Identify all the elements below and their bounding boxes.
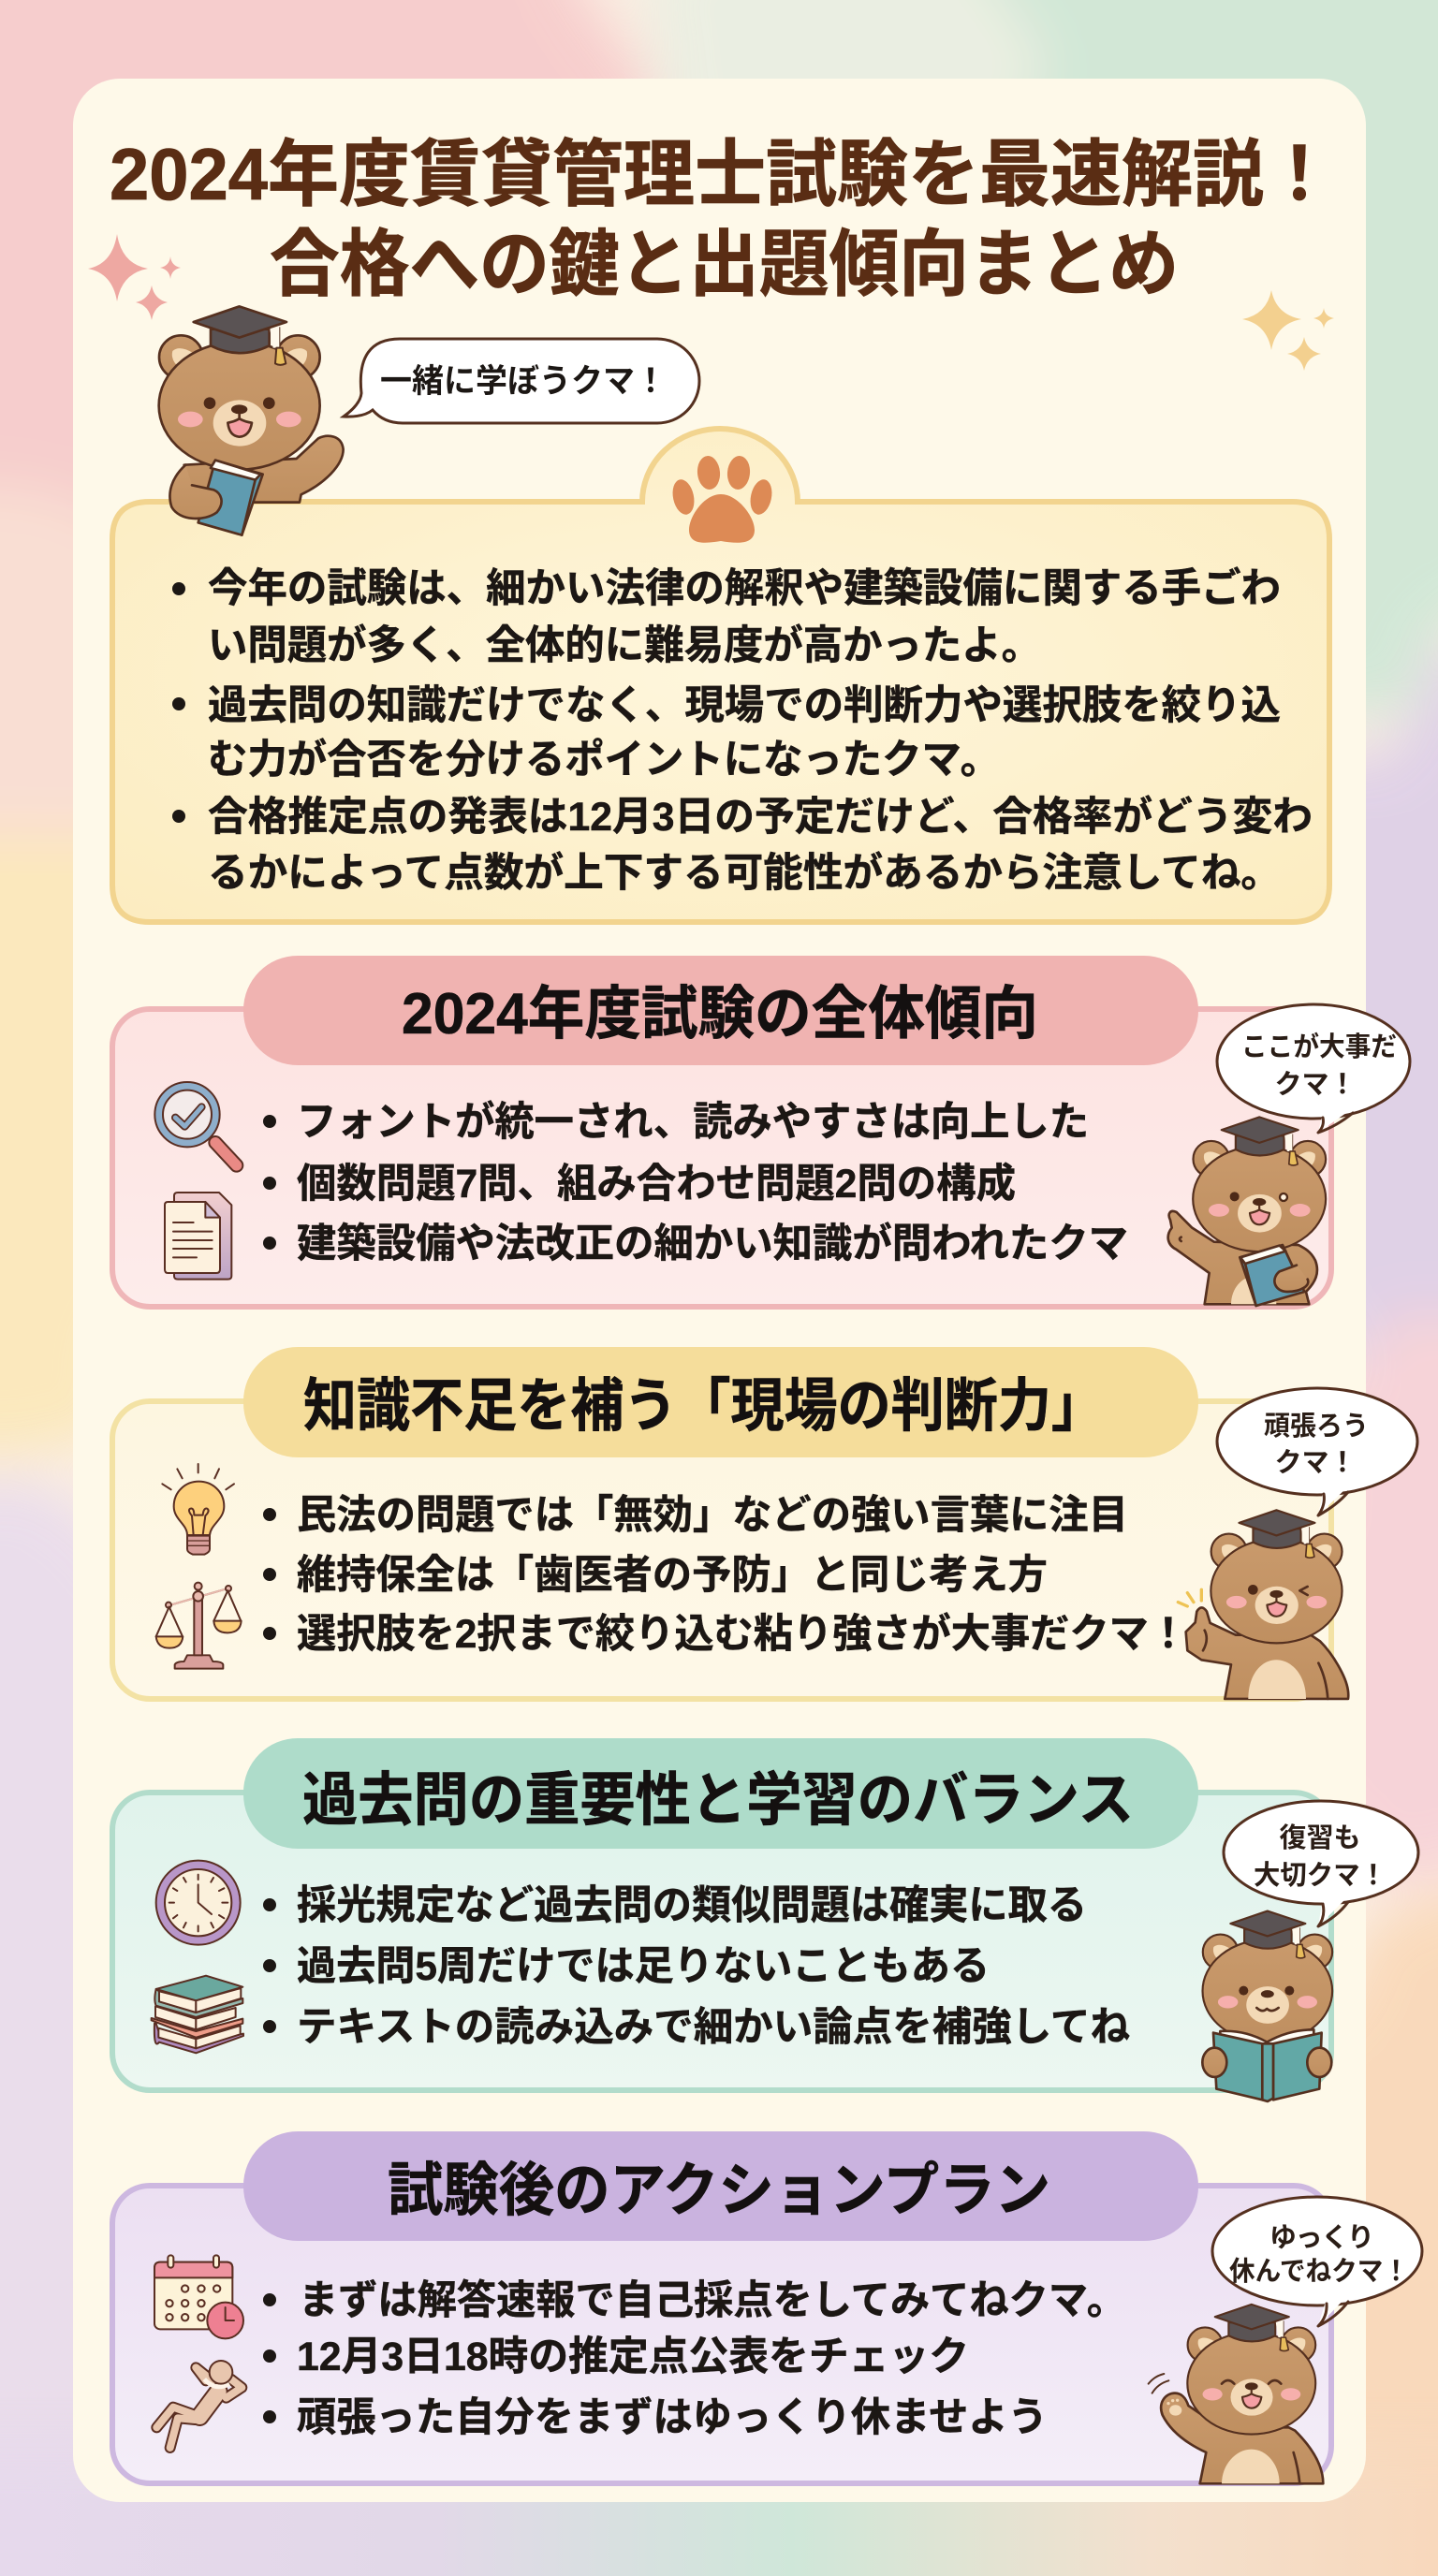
title: 2024年度賃貸管理士試験を最速解説！: [110, 133, 1335, 215]
bullets: 選択肢を2択まで絞り込む粘り強さが大事だクマ！: [297, 1612, 1188, 1657]
panel: 知識不足を補う「現場の判断力」: [112, 1347, 1417, 1699]
heading pill: 試験後のアクションプラン: [388, 2159, 1050, 2223]
bullets: [263, 1493, 1188, 1657]
bear thumbs up, winking: [1178, 1510, 1348, 1699]
speech bubble: 復習も大切クマ！: 大切クマ！: [1254, 1860, 1387, 1891]
speech bubble: 一緒に学ぼうクマ！: [344, 339, 699, 423]
speech bubble: 復習も大切クマ！: 復習も: [1279, 1822, 1361, 1853]
heading pill: [243, 1738, 1198, 1849]
panel: 過去問の重要性と学習のバランス: [112, 1738, 1418, 2101]
panel: 2024年度試験の全体傾向: [112, 956, 1410, 1307]
bear waving: [1149, 2305, 1323, 2483]
panel: 試験後のアクションプラン: [112, 2131, 1422, 2483]
summary bullets: るかによって点数が上下する可能性があるから注意してね。: [208, 851, 1281, 896]
speech bubble: 頑張ろうクマ！: クマ！: [1274, 1448, 1357, 1478]
bullets: 過去問5周だけでは足りないこともある: [297, 1944, 990, 1989]
summary bullets: 過去問の知識だけでなく、現場での判断力や選択肢を絞り込: [208, 683, 1281, 728]
icon: resting person: [156, 2361, 242, 2448]
sparkles left: [88, 234, 181, 320]
bear mascot with book, top: [159, 306, 344, 535]
speech bubble: ここが大事だクマ！: [1217, 1004, 1410, 1133]
bullets: 個数問題7問、組み合わせ問題2問の構成: [297, 1162, 1016, 1207]
speech bubble: ゆっくり休んでねクマ！: ゆっくり: [1269, 2223, 1374, 2253]
icon: paw: [669, 455, 775, 543]
heading pill: 過去問の重要性と学習のバランス: [302, 1768, 1134, 1833]
summary bullets: 今年の試験は、細かい法律の解釈や建築設備に関する手ごわ: [208, 566, 1281, 611]
icon: book stack: [152, 1976, 243, 2053]
bullets: まずは解答速報で自己採点をしてみてねクマ。: [299, 2278, 1126, 2323]
summary bullets: 合格推定点の発表は12月3日の予定だけど、合格率がどう変わ: [208, 795, 1313, 840]
icon: light bulb: [162, 1464, 234, 1555]
bullets: 民法の問題では「無効」などの強い言葉に注目: [297, 1493, 1128, 1538]
bullets: フォントが統一され、読みやすさは向上した: [297, 1100, 1089, 1145]
speech bubble: ここが大事だクマ！: ここが大事だ: [1241, 1031, 1397, 1062]
bullets: 採光規定など過去問の類似問題は確実に取る: [297, 1883, 1087, 1928]
bullets: [263, 2278, 1126, 2440]
bullets: 維持保全は「歯医者の予防」と同じ考え方: [297, 1553, 1048, 1598]
top summary panel: [112, 429, 1329, 922]
bullets: テキストの読み込みで細かい論点を補強してね: [297, 2005, 1130, 2050]
heading pill: 知識不足を補う「現場の判断力」: [303, 1374, 1105, 1439]
summary bullets: む力が合否を分けるポイントになったクマ。: [208, 738, 1000, 783]
icon: balance scale: [156, 1583, 242, 1669]
bullets: 12月3日18時の推定点公表をチェック: [297, 2334, 969, 2379]
heading pill: [243, 956, 1198, 1065]
speech bubble: 頑張ろうクマ！: 頑張ろう: [1264, 1412, 1369, 1442]
speech bubble: ゆっくり休んでねクマ！: [1212, 2197, 1422, 2326]
bear pointing with book: [1168, 1117, 1326, 1306]
title: [110, 133, 1335, 305]
title: 合格への鍵と出題傾向まとめ: [270, 223, 1179, 305]
bullets: [263, 1883, 1130, 2050]
summary bullets: い問題が多く、全体的に難易度が高かったよ。: [208, 623, 1041, 668]
bullets: [263, 1100, 1128, 1266]
speech bubble: 一緒に学ぼうクマ！: 一緒に学ぼうクマ！: [380, 363, 667, 400]
icon: magnifier: [154, 1082, 237, 1165]
icon: document: [165, 1193, 231, 1280]
bullets: 建築設備や法改正の細かい知識が問われたクマ: [297, 1222, 1128, 1266]
bear reading open book: [1202, 1911, 1332, 2101]
speech bubble: ここが大事だクマ！: クマ！: [1274, 1070, 1357, 1100]
heading pill: [243, 1347, 1198, 1457]
speech bubble: 復習も大切クマ！: [1224, 1801, 1418, 1926]
icon: clock: [156, 1861, 241, 1945]
summary bullets: [172, 566, 1313, 896]
heading pill: 2024年度試験の全体傾向: [402, 982, 1038, 1046]
icon: calendar with clock: [154, 2255, 243, 2338]
sparkles right: [1242, 290, 1334, 371]
heading pill: [243, 2131, 1198, 2241]
bullets: 頑張った自分をまずはゆっくり休ませよう: [297, 2395, 1048, 2440]
speech bubble: 頑張ろうクマ！: [1217, 1388, 1417, 1515]
speech bubble: ゆっくり休んでねクマ！: 休んでねクマ！: [1229, 2256, 1409, 2287]
